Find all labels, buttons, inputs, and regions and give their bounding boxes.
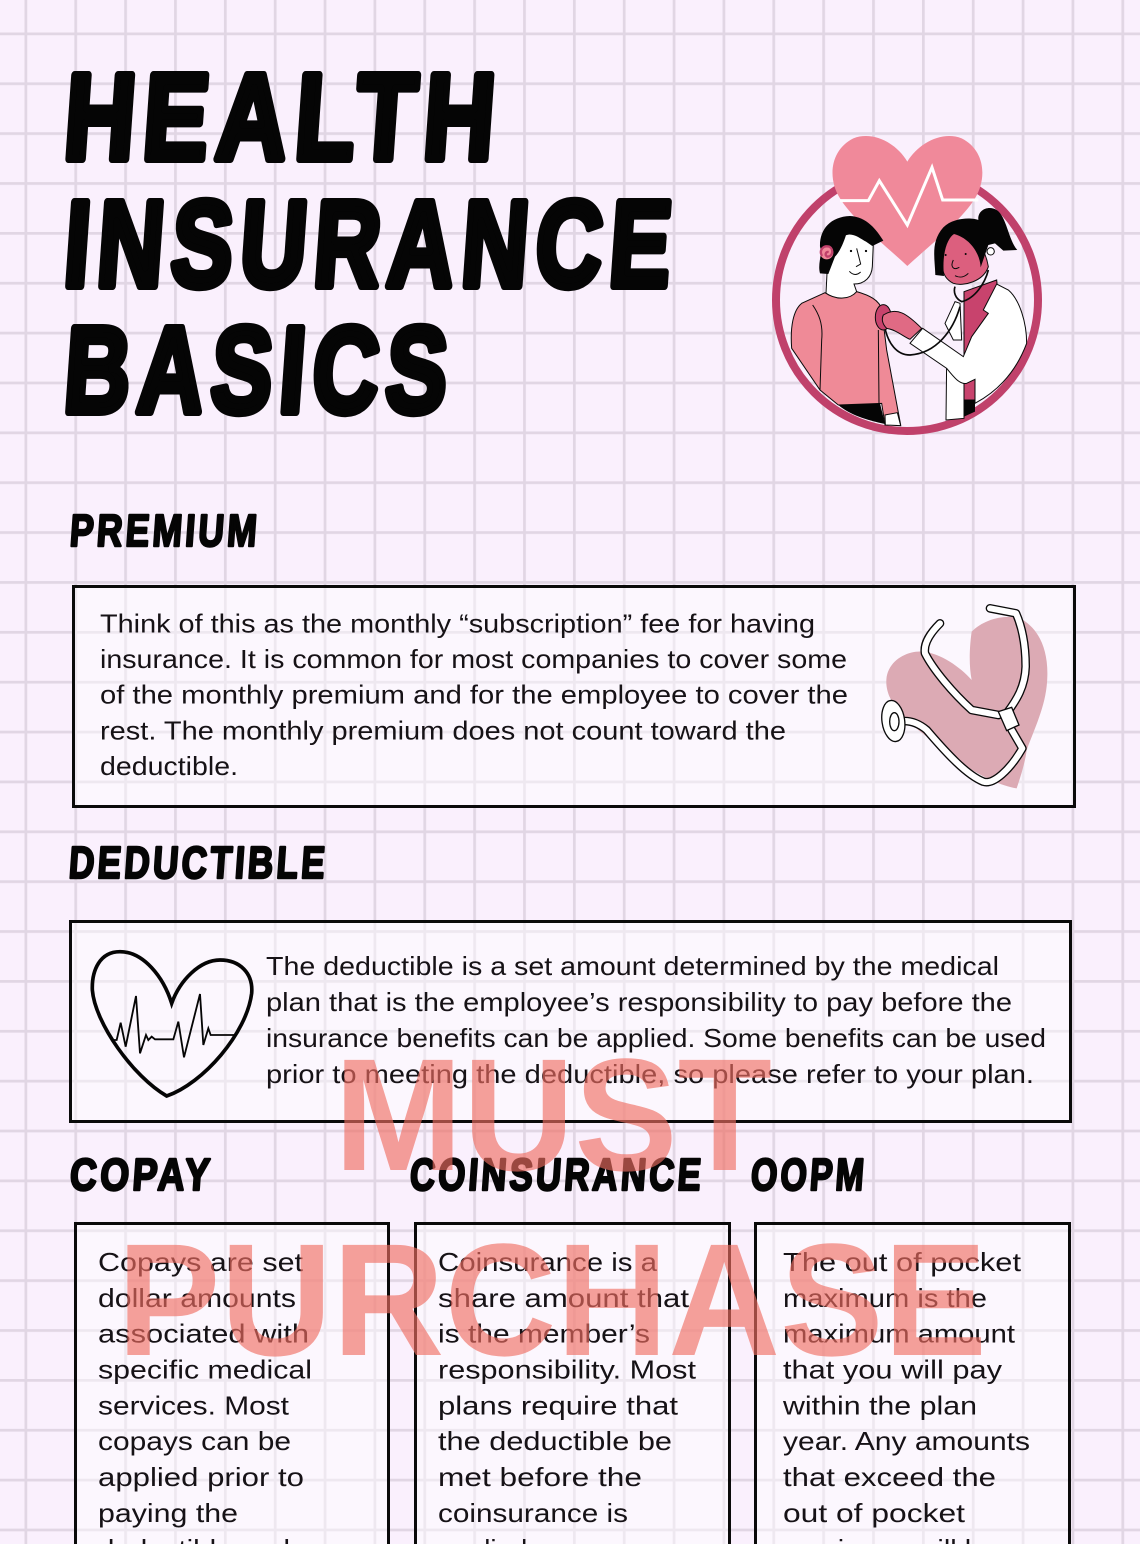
- heading: premium: PREMIUM: [68, 505, 262, 556]
- text: premium definition: of the monthly premium and for the employee to cover the: [100, 680, 848, 710]
- panel: deductible: [70, 922, 1070, 1122]
- text: oopm definition: that exceed the: [783, 1462, 996, 1492]
- text: copay definition: associated with: [98, 1318, 309, 1348]
- text: oopm definition: maximum is the: [783, 1283, 987, 1313]
- panel: premium: [74, 586, 1074, 806]
- text: oopm definition: [782, 1247, 1030, 1544]
- panel: oopm: [756, 1224, 1070, 1544]
- text: coinsurance definition: met before the: [438, 1462, 642, 1492]
- text: oopm definition: maximum amount: [783, 1318, 1016, 1348]
- text: deductible definition: plan that is the employee’s responsibility to pay before the: [266, 987, 1012, 1017]
- text: oopm definition: within the plan: [782, 1390, 977, 1420]
- text: premium definition: insurance. It is common for most companies to cover some: [100, 644, 847, 674]
- watermark: must purchase: [117, 1025, 987, 1389]
- icon: heart with pulse line: [92, 952, 252, 1096]
- title: [60, 48, 684, 438]
- title: INSURANCE: [60, 175, 684, 312]
- icon: heart with pulse: [832, 136, 982, 266]
- text: copay definition: copays can be: [98, 1426, 291, 1456]
- panel: copay: [76, 1224, 388, 1544]
- text: copay definition: [98, 1247, 312, 1544]
- text: premium definition: deductible.: [100, 751, 238, 781]
- heading: coinsurance: COINSURANCE: [408, 1149, 706, 1200]
- text: oopm definition: The out of pocket: [783, 1247, 1022, 1277]
- text: copay definition: specific medical: [98, 1354, 312, 1384]
- text: coinsurance definition: the deductible be: [438, 1426, 672, 1456]
- text: premium definition: Think of this as the monthly “subscription” fee for having: [100, 608, 815, 638]
- heading: copay: COPAY: [68, 1149, 215, 1200]
- text: coinsurance definition: coinsurance is: [438, 1498, 628, 1528]
- panel: coinsurance: [416, 1224, 730, 1544]
- text: copay definition: dollar amounts: [98, 1283, 296, 1313]
- text: oopm definition: that you will pay: [783, 1354, 1002, 1384]
- text: coinsurance definition: responsibility. Most: [438, 1354, 697, 1384]
- text: deductible definition: prior to meeting the deductible, so please refer to your plan.: [266, 1059, 1034, 1089]
- text: coinsurance definition: share amount that: [438, 1283, 690, 1313]
- text: copay definition: Copays are set: [98, 1247, 304, 1277]
- text: copay definition: applied prior to: [98, 1462, 304, 1492]
- text: deductible definition: The deductible is a set amount determined by the medical: [266, 951, 999, 981]
- text: oopm definition: out of pocket: [783, 1498, 966, 1528]
- illustration: doctor examining patient: [776, 136, 1038, 431]
- text: deductible definition: [266, 951, 1046, 1089]
- patient: [791, 216, 901, 426]
- text: deductible definition: insurance benefits can be applied. Some benefits can be used: [266, 1023, 1046, 1053]
- text: coinsurance definition: Coinsurance is a: [438, 1247, 658, 1277]
- text: coinsurance definition: is the member’s: [438, 1318, 650, 1348]
- watermark: must purchase: MUST: [334, 1025, 772, 1204]
- text: copay definition: services. Most: [98, 1390, 290, 1420]
- title: BASICS: [60, 301, 460, 438]
- title: HEALTH: [60, 48, 508, 185]
- icon: stethoscope on heart: [879, 608, 1047, 788]
- text: coinsurance definition: plans require that: [438, 1390, 679, 1420]
- watermark: must purchase: PURCHASE: [117, 1210, 987, 1389]
- text: copay definition: paying the: [98, 1498, 238, 1528]
- text: coinsurance definition: [438, 1247, 697, 1544]
- text: premium definition: [100, 608, 848, 781]
- text: premium definition: rest. The monthly premium does not count toward the: [100, 716, 786, 746]
- text: oopm definition: year. Any amounts: [783, 1426, 1030, 1456]
- ring: [776, 169, 1038, 431]
- heading: oopm: OOPM: [749, 1149, 869, 1200]
- doctor: [875, 208, 1027, 420]
- heading: deductible: DEDUCTIBLE: [67, 837, 330, 888]
